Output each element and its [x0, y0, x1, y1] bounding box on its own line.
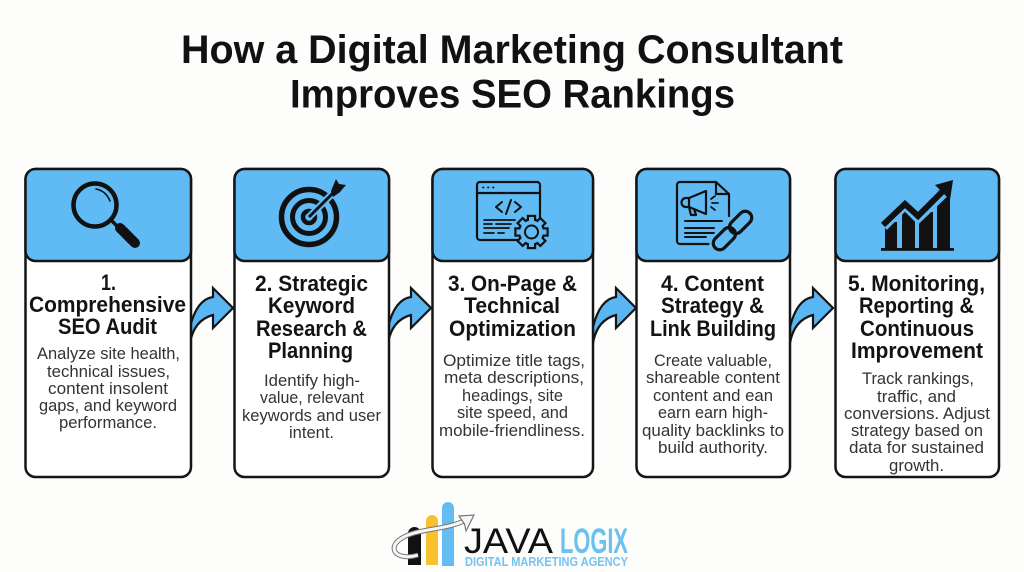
- body text: step 2: intent.: [289, 424, 334, 442]
- body text: step 2: keywords and user: [242, 407, 381, 425]
- logo wordmark: [464, 522, 628, 561]
- logo wordmark: JAVA: [464, 522, 554, 561]
- heading: step 2: Keyword: [268, 293, 355, 318]
- body text: step 5: Track rankings,: [862, 370, 974, 388]
- body text: step 2: value, relevant: [260, 389, 364, 407]
- logo wordmark: LOGIX: [560, 522, 628, 561]
- arrow: step 1 to step 2: [190, 288, 233, 343]
- heading: step 4: [650, 271, 776, 341]
- heading: step 1: Comprehensive: [29, 292, 186, 317]
- arrow: step 4 to step 5: [790, 288, 833, 343]
- heading: step 1: SEO Audit: [58, 314, 158, 339]
- heading: step 1: 1.: [101, 270, 116, 295]
- heading: step 3: Optimization: [449, 316, 576, 341]
- logo: Java Logix: [394, 502, 629, 569]
- body text: step 4: build authority.: [658, 439, 768, 457]
- body text: step 5: data for sustained: [849, 439, 984, 457]
- body text: step 4: [642, 352, 784, 457]
- body text: step 3: Optimize title tags,: [443, 352, 585, 370]
- body text: step 1: [37, 345, 180, 432]
- body text: step 1: gaps, and keyword: [39, 397, 177, 415]
- heading: step 5: 5. Monitoring,: [848, 271, 985, 296]
- title: How a Digital Marketing Consultant: [181, 28, 843, 72]
- body text: step 3: [439, 352, 585, 440]
- heading: step 5: Improvement: [851, 338, 984, 363]
- heading: step 2: Planning: [268, 338, 353, 363]
- body text: step 4: Create valuable,: [654, 352, 772, 370]
- body text: step 4: shareable content: [646, 369, 780, 387]
- body text: step 1: technical issues,: [47, 363, 170, 381]
- icon: code window with gear: [477, 182, 546, 247]
- body text: step 5: strategy based on: [851, 422, 983, 440]
- panel: step 2 keyword research: [234, 169, 389, 477]
- icon: target with arrow: [282, 179, 346, 244]
- heading: step 4: Strategy &: [661, 293, 764, 318]
- body text: step 3: site speed, and: [457, 404, 568, 422]
- body text: step 5: traffic, and: [877, 388, 956, 406]
- body text: step 4: earn earn high-: [658, 404, 768, 422]
- body text: step 3: headings, site: [462, 387, 563, 405]
- arrow: step 2 to step 3: [388, 288, 431, 343]
- body text: step 1: performance.: [59, 414, 157, 432]
- heading: step 3: 3. On-Page &: [448, 271, 577, 296]
- body text: step 5: conversions. Adjust: [844, 405, 990, 423]
- body text: step 1: content insolent: [48, 380, 168, 398]
- heading: step 5: Reporting &: [859, 293, 974, 318]
- icon: rising bar chart with arrow: [881, 180, 954, 251]
- panel: step 1 audit: [26, 169, 191, 477]
- logo tagline: DIGITAL MARKETING AGENCY: [465, 555, 629, 569]
- body text: step 5: [844, 370, 990, 475]
- heading: step 4: 4. Content: [661, 271, 765, 296]
- heading: step 5: Continuous: [860, 316, 974, 341]
- body text: step 4: content and ean: [653, 387, 773, 405]
- body text: step 2: Identify high-: [264, 372, 360, 390]
- panel: step 5 monitoring: [836, 169, 999, 477]
- body text: step 2: [242, 372, 381, 442]
- icon part: gear: [516, 217, 546, 247]
- title: Improves SEO Rankings: [290, 72, 735, 116]
- heading: step 1: [29, 270, 186, 339]
- logo swoosh arrow: [394, 515, 474, 557]
- heading: step 3: Technical: [464, 293, 560, 318]
- heading: step 5: [848, 271, 985, 363]
- body text: step 5: growth.: [889, 457, 944, 475]
- body text: step 1: Analyze site health,: [37, 345, 180, 363]
- logo bars: [408, 502, 454, 566]
- icon: magnifying glass: [74, 184, 135, 243]
- heading: step 4: Link Building: [650, 316, 776, 341]
- panel: step 3 on-page optimization: [432, 169, 593, 477]
- body text: step 3: meta descriptions,: [444, 369, 584, 387]
- panel: step 4 content and links: [636, 169, 790, 477]
- heading: step 2: 2. Strategic: [255, 271, 368, 296]
- icon: document, megaphone and chain link: [677, 182, 754, 252]
- heading: step 2: [255, 271, 368, 363]
- heading: step 3: [448, 271, 577, 341]
- arrow: step 3 to step 4: [593, 288, 636, 343]
- title: [181, 28, 843, 116]
- body text: step 4: quality backlinks to: [642, 422, 784, 440]
- body text: step 3: mobile-friendliness.: [439, 422, 585, 440]
- heading: step 2: Research &: [256, 316, 367, 341]
